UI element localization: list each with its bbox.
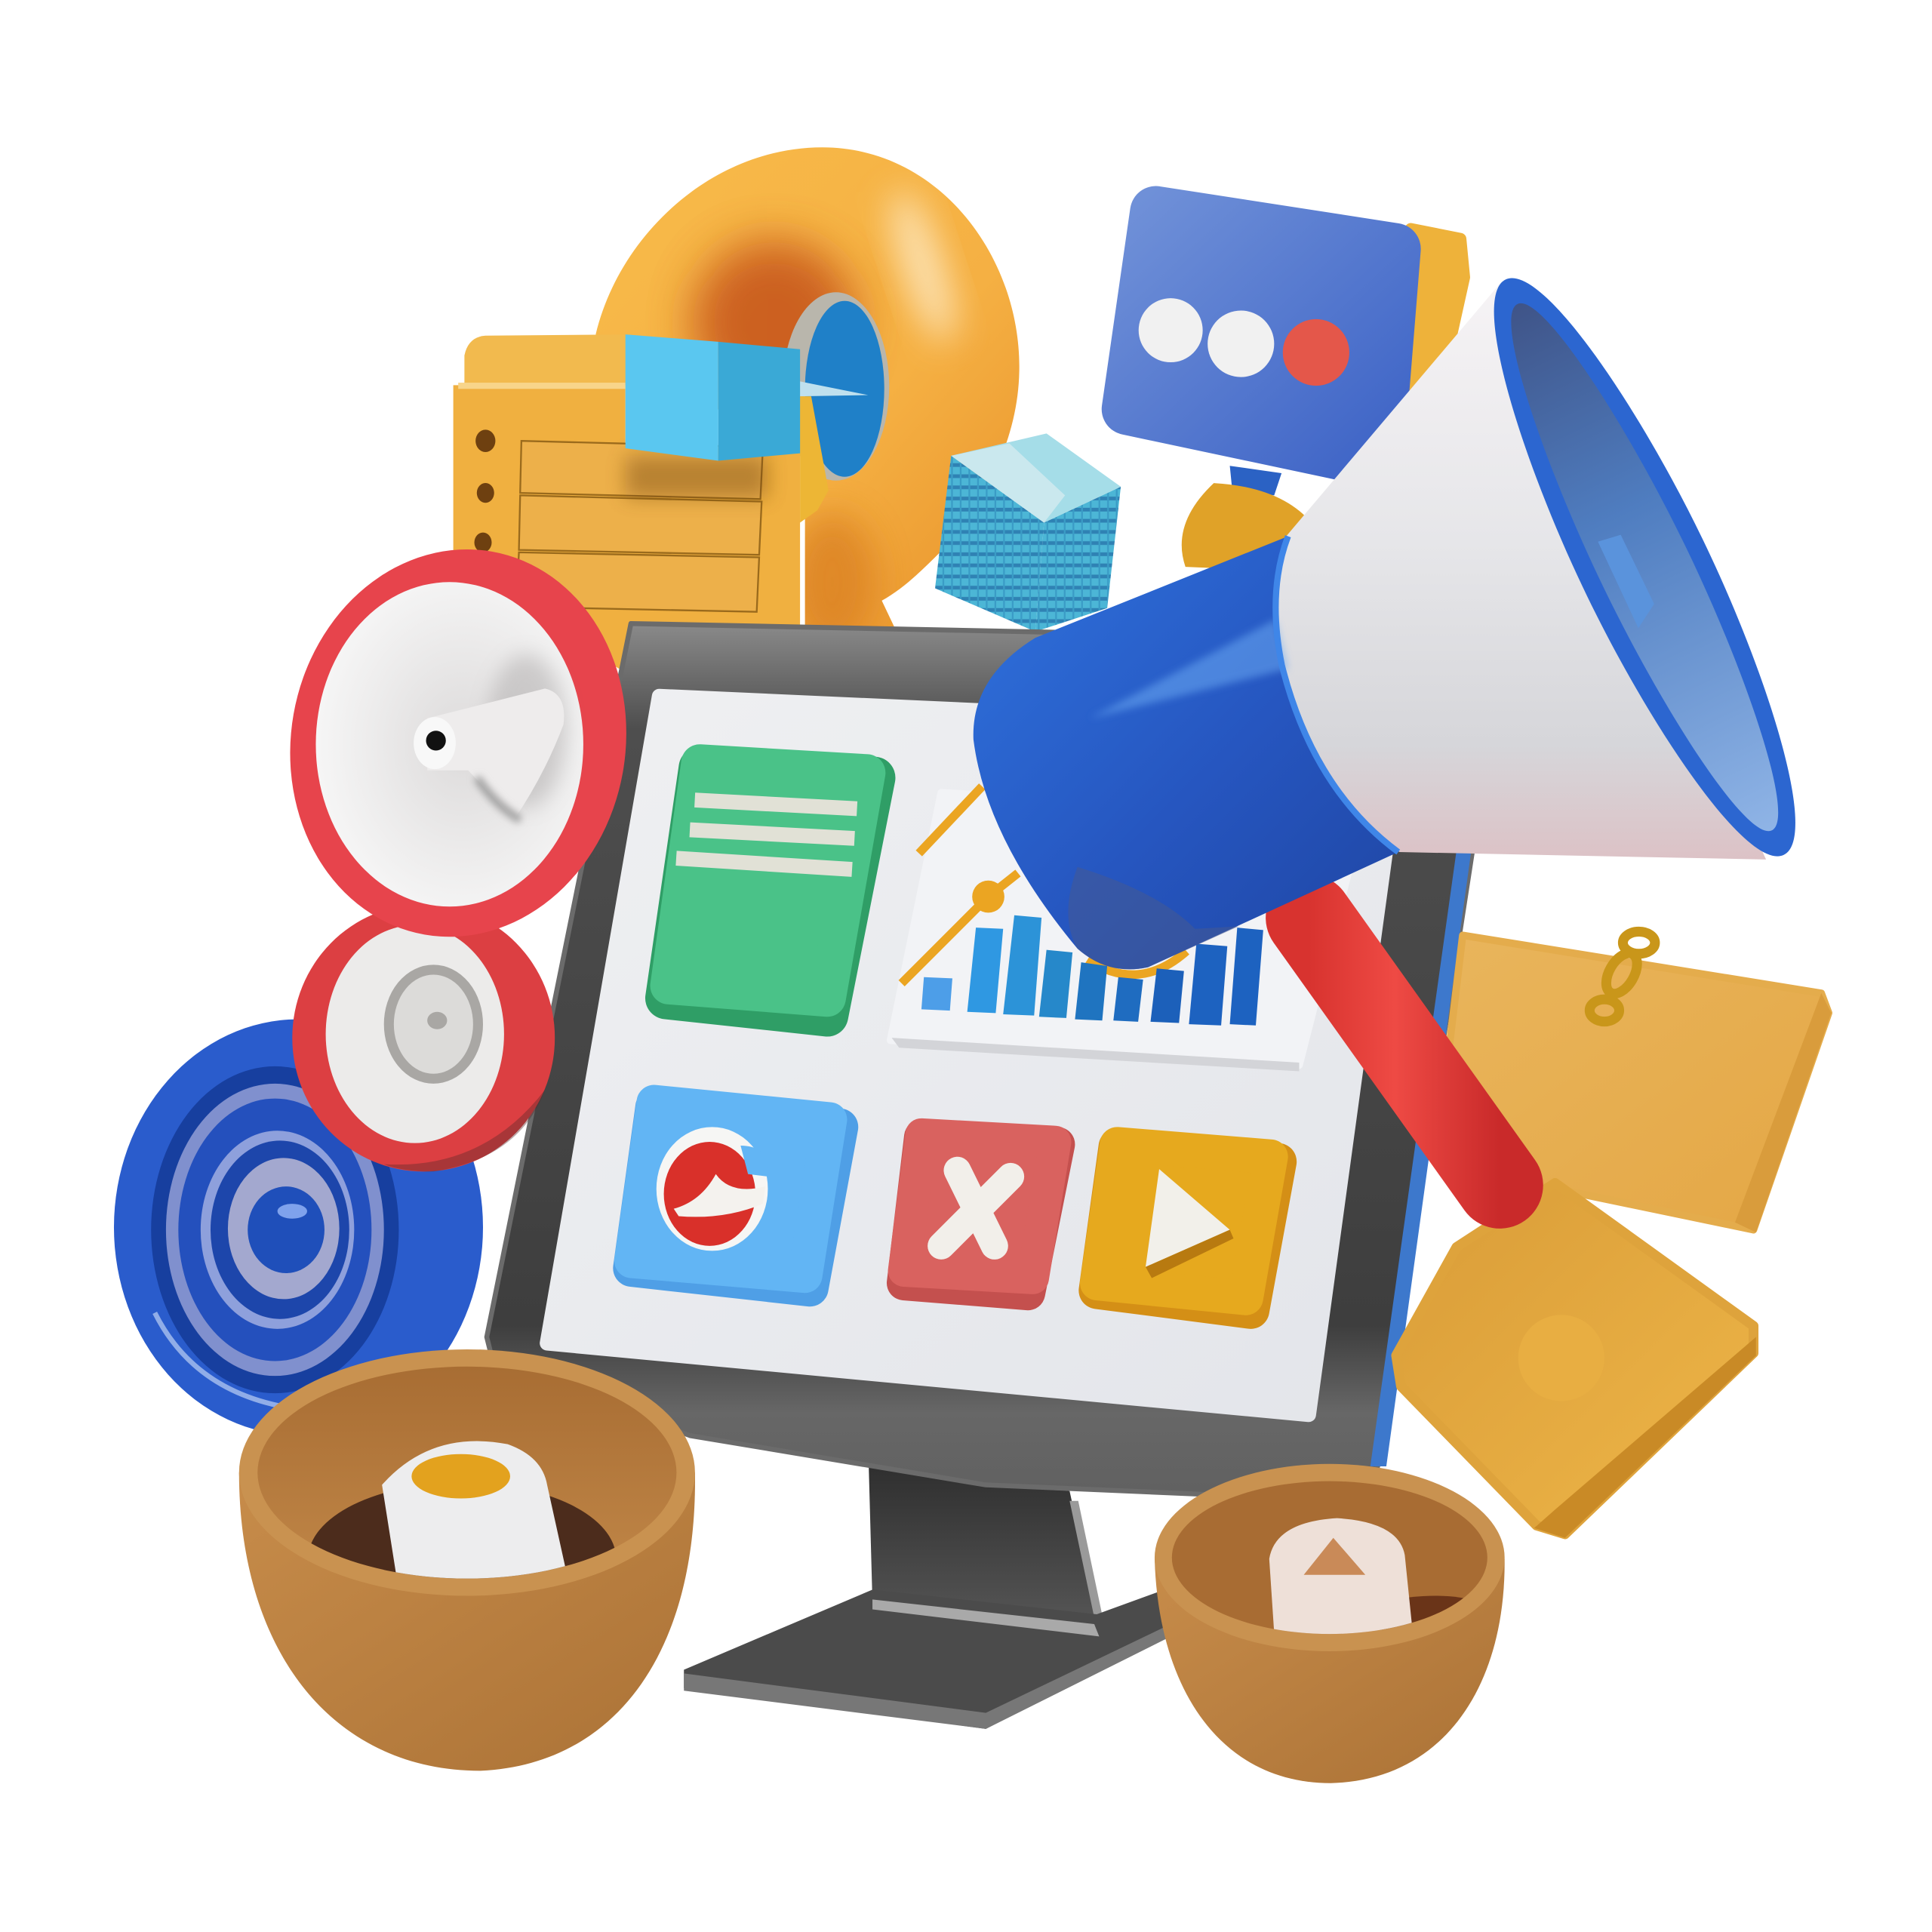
- tile: yellow play: [1097, 1144, 1278, 1310]
- monitor stand: [684, 1466, 1171, 1729]
- icon: gold panel with chain: [1441, 931, 1831, 1232]
- red dot: [1283, 319, 1349, 386]
- white X: [941, 1171, 1011, 1246]
- icon: red rimmed lower speaker: [292, 904, 555, 1171]
- tile: light blue logo: [632, 1103, 840, 1288]
- orange trend line: [919, 786, 982, 854]
- blue bars: [921, 915, 1263, 1026]
- icon: red rimmed upper speaker: [260, 522, 657, 964]
- monitor screen: [547, 697, 1402, 1414]
- icon: right clay bowl with roll: [1155, 1464, 1505, 1783]
- monitor bezel: [487, 623, 1472, 1501]
- icon: blue speaker: [114, 1020, 483, 1435]
- gold joint: [1182, 483, 1312, 569]
- icon: textured teal cube: [935, 433, 1121, 632]
- megaphone mouth: [1447, 251, 1841, 883]
- megaphone handle: [1309, 918, 1500, 1185]
- icon: cyan cube: [626, 334, 800, 460]
- white dot: [1139, 298, 1203, 362]
- gold chain: [1589, 931, 1655, 1022]
- stand connector: [1230, 466, 1281, 495]
- chart card: [891, 786, 1362, 1071]
- white dot: [1208, 310, 1274, 377]
- group: chat bubble and stand, scaled from overview: [1128, 212, 1464, 569]
- icon: orange torus ring: [595, 147, 1020, 651]
- server drawer slots: [516, 441, 763, 612]
- monitor: [487, 623, 1472, 1729]
- tile: red close: [904, 1134, 1057, 1293]
- megaphone cone: [1271, 282, 1766, 860]
- icon: chat bubble backing: [1392, 229, 1464, 425]
- illustration: digital marketing 3D scene: [113, 147, 1832, 1783]
- icon: gold diamond panel: [1396, 1183, 1756, 1538]
- monitor blue side edge: [1371, 851, 1472, 1466]
- icon: left clay bowl with roll: [239, 1349, 695, 1770]
- group: bowls, scaled from overview: [239, 1349, 1505, 1783]
- megaphone blue grip: [974, 537, 1398, 969]
- icon: chat bubble: [1128, 212, 1395, 462]
- icon: large megaphone: [974, 251, 1841, 1185]
- group: gold panels, scaled from overview: [1396, 931, 1831, 1538]
- tile: green document: [666, 763, 875, 1016]
- icon: yellow server box: [454, 334, 800, 669]
